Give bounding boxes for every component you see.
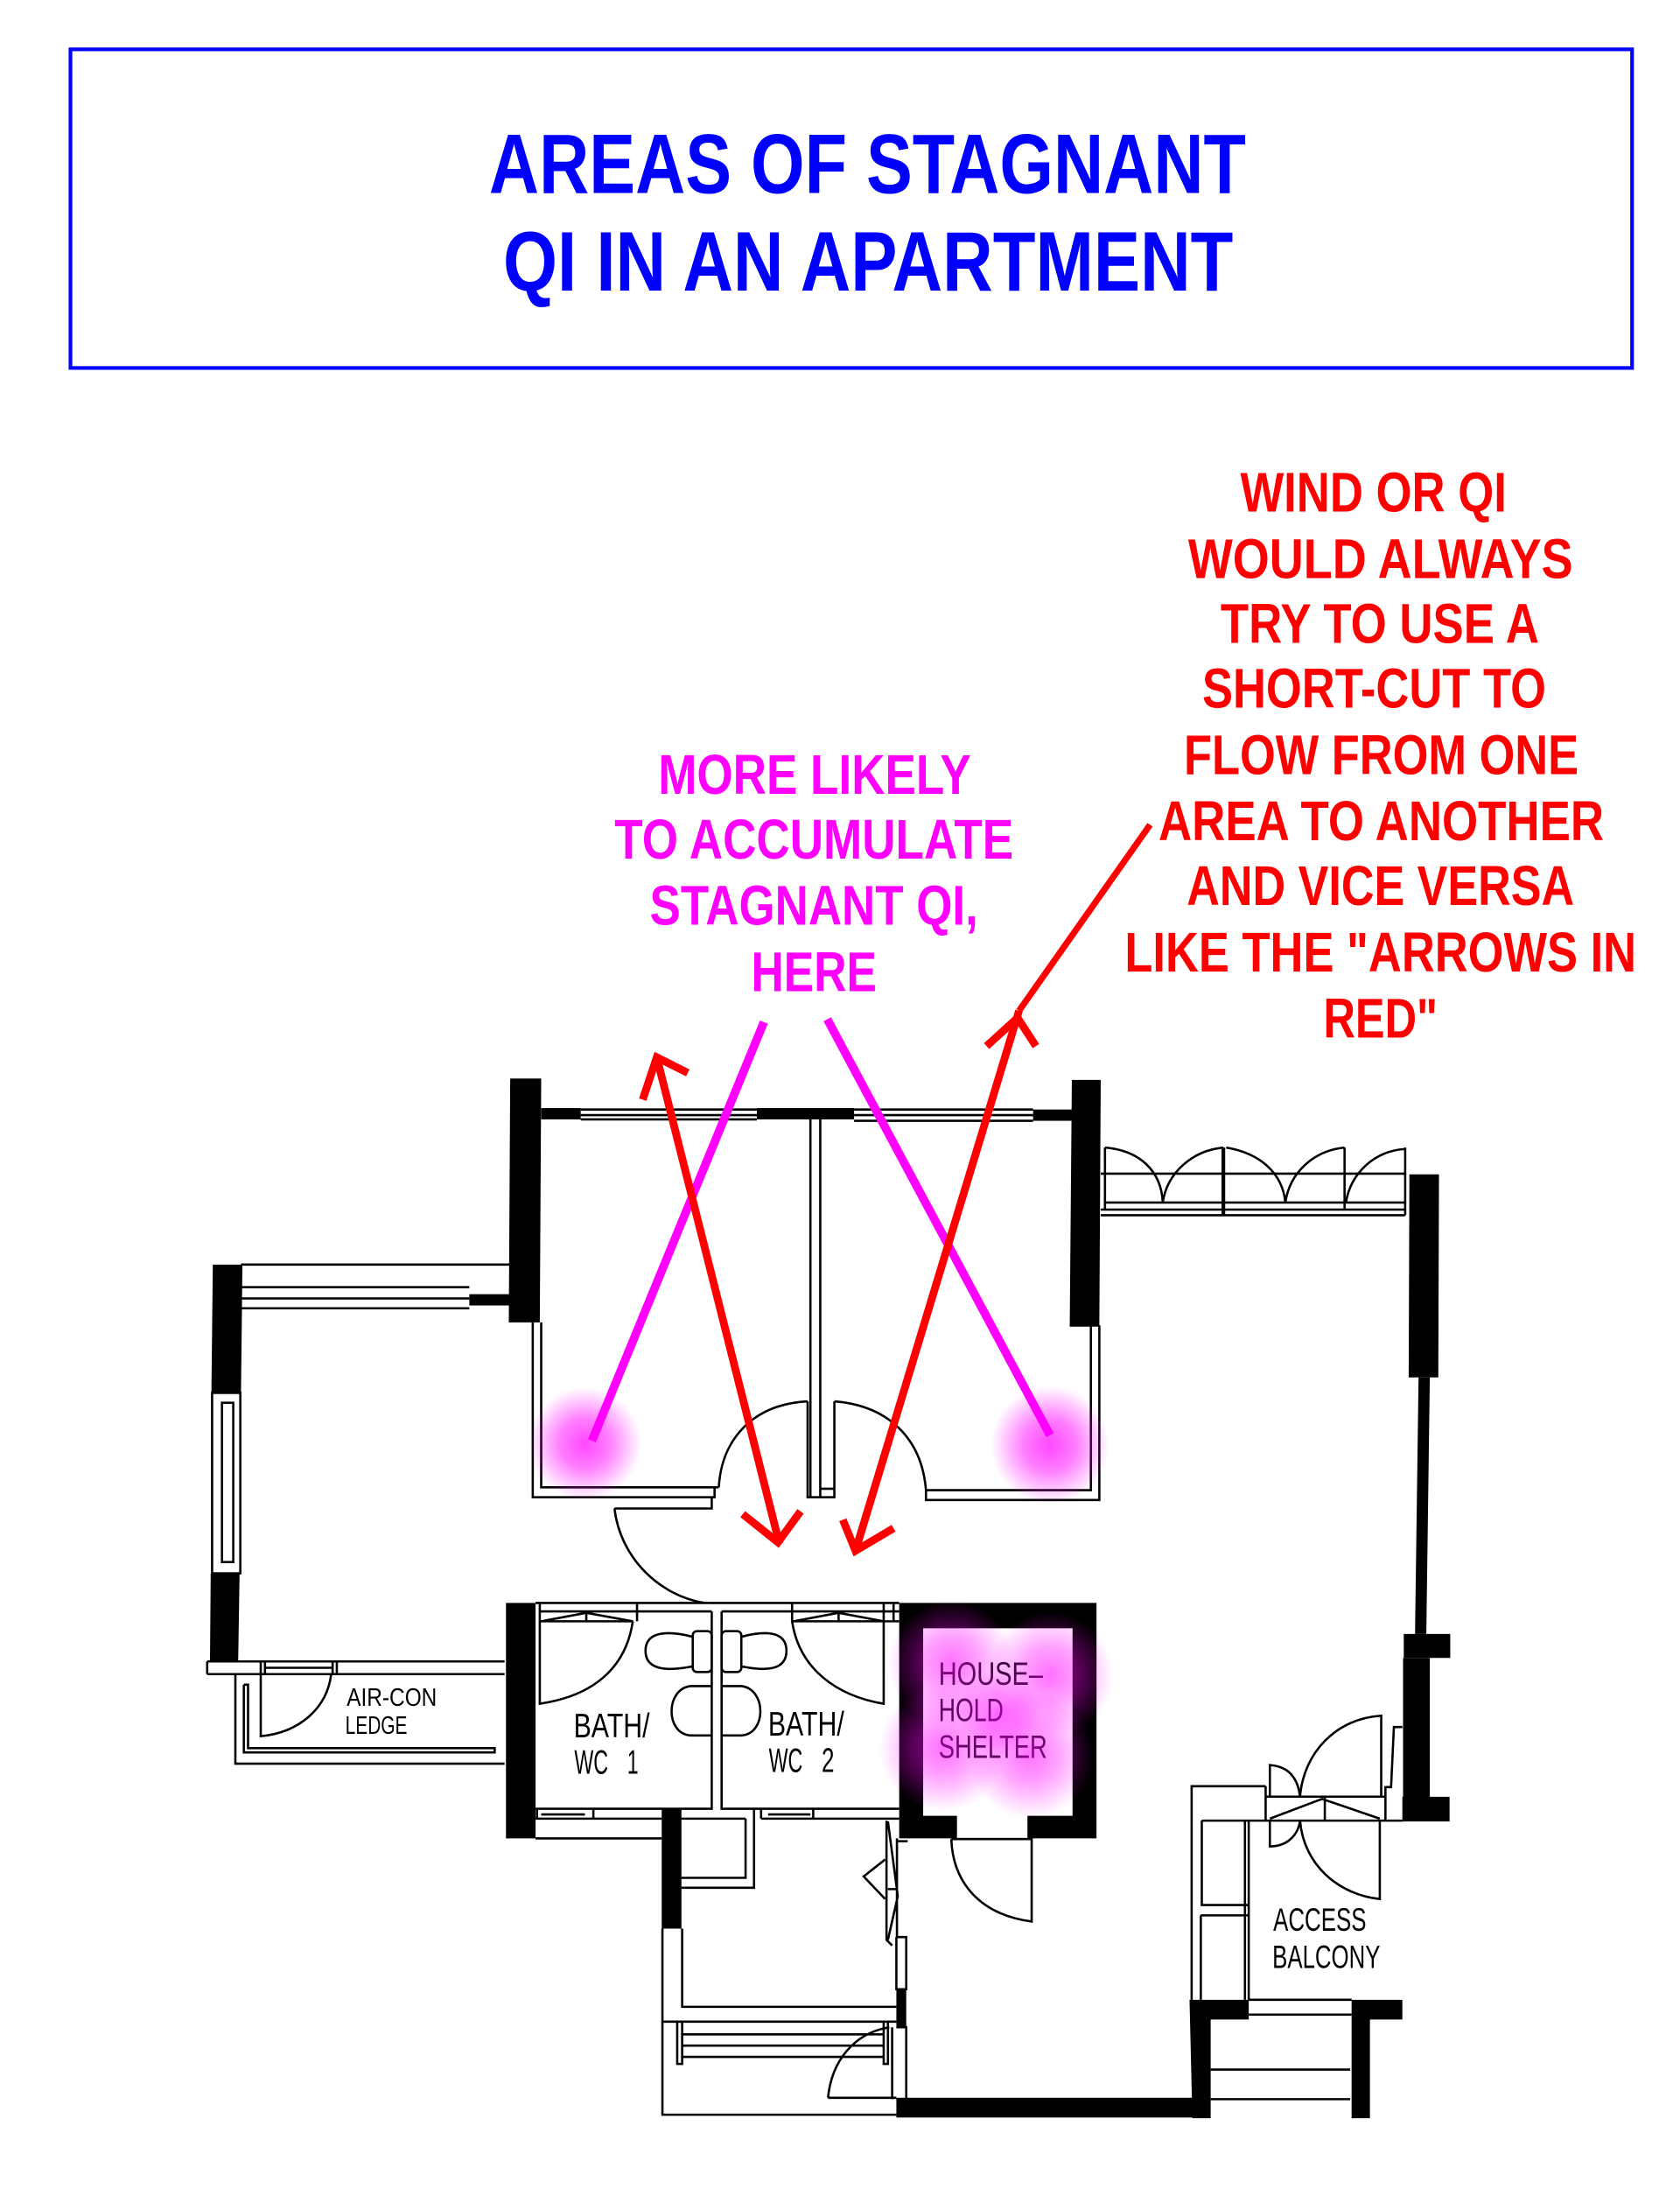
red callout: WIND OR QI bbox=[1240, 461, 1507, 524]
title text bbox=[489, 118, 1246, 309]
title box bbox=[71, 49, 1632, 368]
kitchen and service yard bbox=[662, 1821, 907, 2115]
bedroom windows and double walls bbox=[533, 1110, 1099, 1603]
air-con label: LEDGE bbox=[346, 1712, 408, 1740]
magenta callout: HERE bbox=[752, 940, 877, 1003]
bathroom labels: WC bbox=[574, 1743, 608, 1781]
red callout: AND VICE VERSA bbox=[1186, 854, 1574, 917]
access balcony label: BALCONY bbox=[1272, 1938, 1380, 1975]
red callout bbox=[1124, 461, 1636, 1050]
bathroom labels: 2 bbox=[822, 1743, 835, 1780]
magenta callout: STAGNANT QI, bbox=[650, 874, 978, 937]
red callout: RED" bbox=[1323, 987, 1438, 1050]
red arrow: left double-headed bbox=[642, 1057, 801, 1544]
household shelter label: HOUSE– bbox=[939, 1655, 1043, 1692]
air-con label: AIR-CON bbox=[346, 1684, 437, 1712]
household shelter label: HOLD bbox=[939, 1692, 1004, 1729]
air-con ledge bbox=[207, 1661, 505, 1764]
magenta callout: MORE LIKELY bbox=[658, 743, 971, 806]
red callout: FLOW FROM ONE bbox=[1184, 723, 1578, 786]
access balcony label bbox=[1272, 1901, 1380, 1975]
red callout: TRY TO USE A bbox=[1221, 592, 1539, 655]
stagnant qi glow: household shelter bbox=[879, 1600, 1113, 1819]
title text: QI IN AN APARTMENT bbox=[503, 215, 1233, 309]
bathroom labels bbox=[574, 1706, 844, 1781]
red callout: WOULD ALWAYS bbox=[1188, 527, 1573, 590]
magenta callout bbox=[614, 743, 1013, 1003]
bathrooms bbox=[536, 1603, 900, 1888]
access balcony label: ACCESS bbox=[1273, 1901, 1366, 1938]
solid walls bbox=[210, 1078, 1450, 2118]
access balcony gate and storage bbox=[1192, 1715, 1403, 2099]
floor plan bbox=[207, 1078, 1450, 2118]
stagnant qi glow: right bedroom corner bbox=[990, 1386, 1110, 1505]
magenta callout: TO ACCUMULATE bbox=[614, 808, 1013, 871]
red callout: SHORT-CUT TO bbox=[1202, 657, 1546, 720]
bathroom labels: 1 bbox=[627, 1743, 639, 1781]
folding doors bbox=[1101, 1147, 1405, 1215]
toilets bbox=[693, 1631, 711, 1672]
bathroom labels: WC bbox=[769, 1743, 802, 1780]
household shelter label: SHELTER bbox=[939, 1729, 1047, 1765]
air-con label bbox=[346, 1684, 437, 1740]
shelter door bbox=[951, 1839, 1032, 1921]
title text: AREAS OF STAGNANT bbox=[489, 118, 1246, 212]
bathroom labels: BATH/ bbox=[768, 1706, 844, 1743]
magenta pointer lines bbox=[592, 1020, 1050, 1441]
red arrow: right double-headed with leader bbox=[843, 824, 1150, 1551]
left door, right door bbox=[540, 1621, 884, 1704]
household shelter walls bbox=[900, 1603, 1096, 1838]
stagnant qi glow: left bedroom corner bbox=[528, 1387, 641, 1500]
bathroom labels: BATH/ bbox=[574, 1708, 650, 1745]
household shelter label bbox=[939, 1655, 1047, 1765]
left wing balcony and window bbox=[212, 1265, 510, 1574]
